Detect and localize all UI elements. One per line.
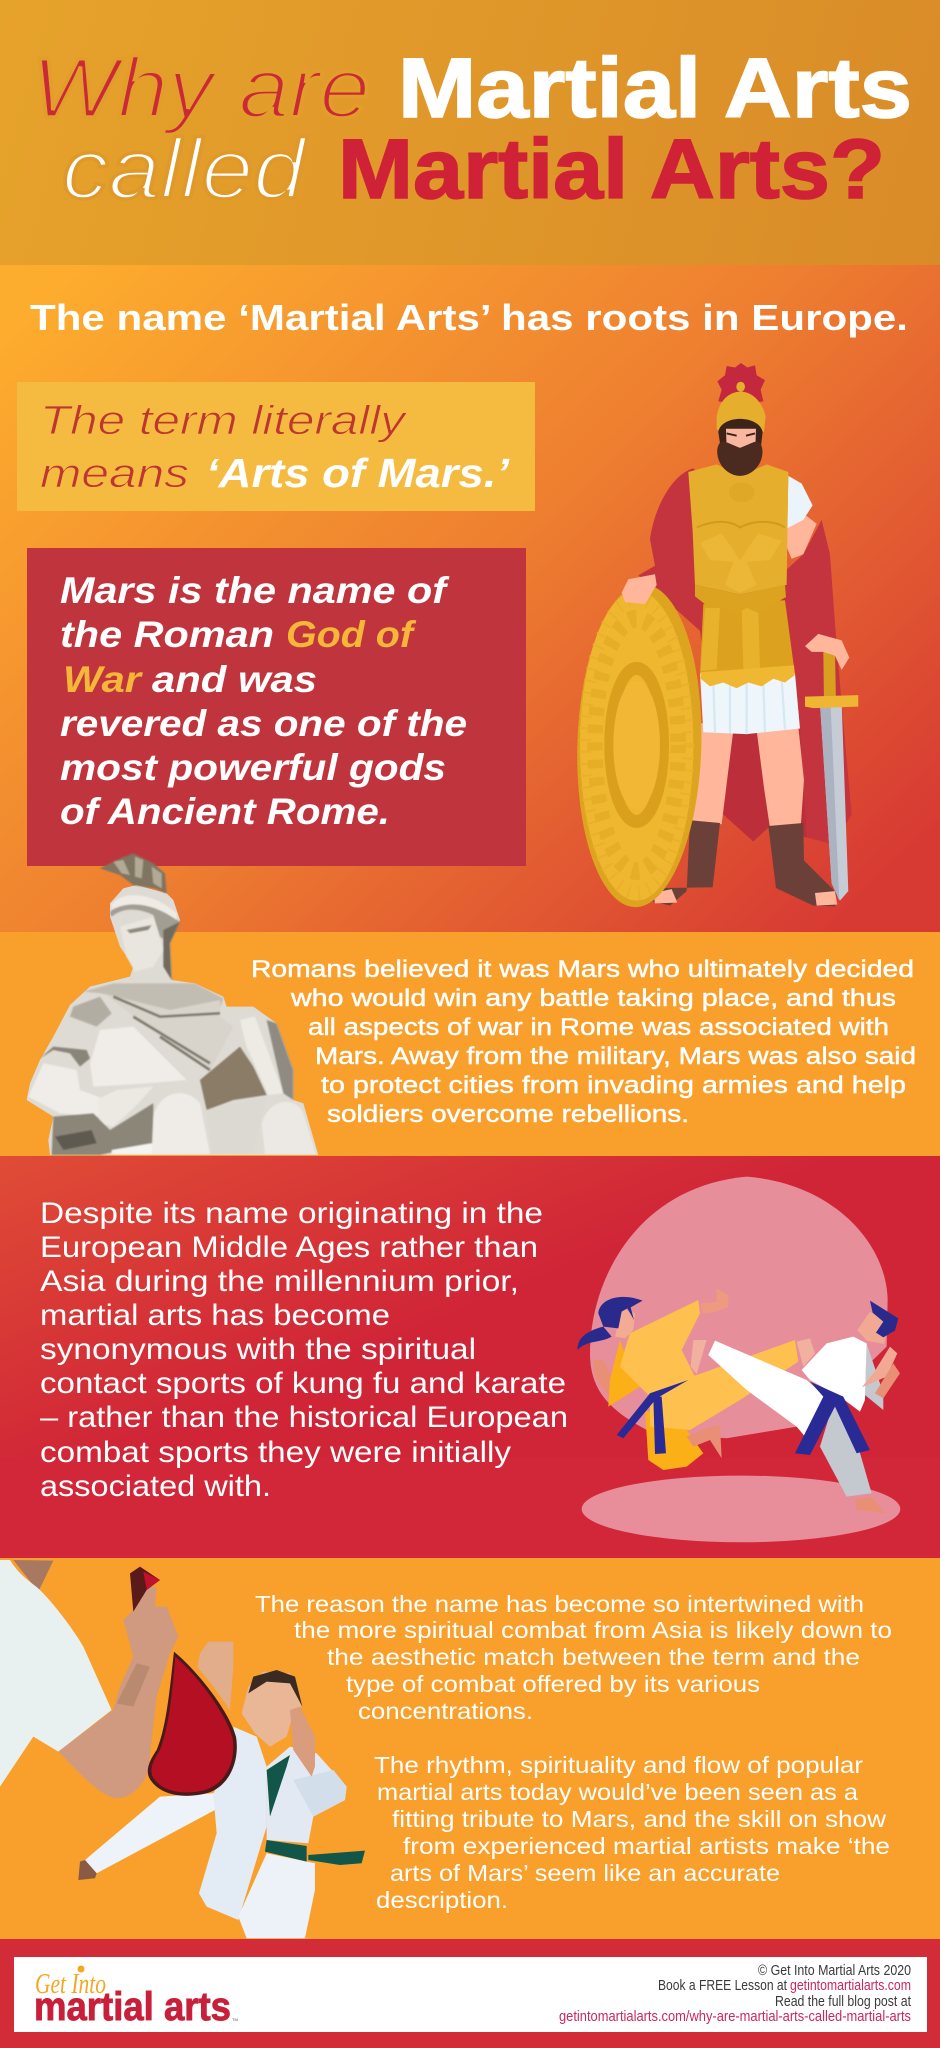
panel: Mars introduction [0, 265, 940, 932]
logo: Get Into Martial Arts: martial arts [34, 1985, 231, 2029]
drapery [83, 983, 223, 1017]
text block: credits and links [559, 1962, 912, 2025]
text block: Romans believed: soldiers overcome rebellions. [327, 1101, 689, 1128]
callout: Arts of Mars: The term literally [40, 397, 408, 443]
heading: roots in Europe: The name ‘Martial Arts’ has roots in Europe. [30, 297, 908, 338]
text block: tribute to Mars: description. [376, 1887, 508, 1913]
text block: tribute to Mars: martial arts today would’ve been seen as a [377, 1779, 858, 1805]
armor [700, 600, 794, 674]
text block: aesthetic match: the aesthetic match between the term and the [327, 1644, 860, 1670]
panel: footer [0, 1939, 940, 2048]
panel: title band [0, 0, 940, 265]
callout: Arts of Mars: ‘Arts of Mars.’ [206, 450, 510, 496]
callout: Mars is the Roman God of War: of Ancient Rome. [60, 791, 390, 832]
boy [78, 1642, 365, 1938]
text block: Romans believed: Romans believed it was Mars who ultimately decided [251, 956, 914, 983]
woman fighter [578, 1288, 815, 1470]
panel: The reason the name [0, 1558, 940, 1939]
face [120, 917, 163, 972]
text block: tribute to Mars: The rhythm, spirituality and flow of popular [374, 1752, 863, 1778]
text block: credits and links: © Get Into Martial Arts 2020 [758, 1962, 911, 1979]
text block: Romans believed: to protect cities from invading armies and help [321, 1072, 906, 1099]
text block: tribute to Mars: from experienced martial artists make ‘the [403, 1833, 890, 1859]
text block: credits and links: Read the full blog post at [775, 1993, 912, 2010]
callout: Mars is the Roman God of War: War [63, 659, 144, 700]
text block: aesthetic match [255, 1591, 892, 1724]
logo: Get Into Martial Arts [34, 1966, 238, 2029]
cavity behind drape [200, 1047, 267, 1110]
panel: Despite its name [0, 1156, 940, 1558]
callout: Mars is the Roman God of War: revered as one of the [60, 703, 467, 744]
callout: Mars is the Roman God of War: God of [286, 614, 417, 655]
text block: credits and links: Book a FREE Lesson at [658, 1977, 788, 1994]
plume [100, 853, 167, 893]
text block: Despite its name: Despite its name originating in the [40, 1197, 543, 1230]
sleeve [40, 1047, 90, 1067]
kilt [700, 673, 800, 734]
text block: credits and links: getintomartialarts.com [790, 1977, 911, 1994]
text block: aesthetic match: type of combat offered by its various [346, 1671, 760, 1697]
callout: Arts of Mars [17, 382, 535, 511]
text block: Despite its name: associated with. [40, 1470, 271, 1503]
title: Why are [32, 41, 370, 135]
callout: Arts of Mars: means [40, 450, 189, 496]
legs [692, 723, 733, 824]
floor shadow [582, 1476, 900, 1542]
text block: aesthetic match: The reason the name has become so intertwined with [255, 1591, 864, 1617]
text block: Despite its name: martial arts has become [40, 1299, 390, 1332]
statue surface shading [28, 853, 316, 1155]
head [717, 363, 765, 407]
panel: Romans believed [0, 932, 940, 1156]
text block: aesthetic match: concentrations. [358, 1698, 533, 1724]
text block: tribute to Mars [374, 1752, 890, 1913]
callout: Mars is the Roman God of War: Mars is the name of [60, 570, 450, 611]
callout: Mars is the Roman God of War: most powerful gods [60, 747, 446, 788]
shield [572, 582, 706, 910]
cape [638, 468, 852, 844]
callout: Mars is the Roman God of War [27, 548, 526, 866]
icon: boy kicking a coach's pad [0, 1560, 365, 1938]
text block: Romans believed: who would win any battle taking place, and thus [290, 985, 896, 1012]
hand on sword [805, 634, 849, 670]
arm and sleeve [785, 516, 817, 559]
belly and arm [90, 1027, 187, 1087]
callout: Mars is the Roman God of War: and was [152, 659, 317, 700]
backdrop blob [590, 1177, 888, 1438]
title: Martial Arts? [338, 122, 885, 216]
text block: Romans believed: Mars. Away from the military, Mars was also said [315, 1043, 916, 1070]
text block: Despite its name: combat sports they were initially [40, 1436, 511, 1469]
text block: Despite its name [40, 1197, 568, 1503]
text block: Despite its name: Asia during the millennium prior, [40, 1265, 519, 1298]
icon: Roman god Mars with shield and sword [572, 363, 858, 910]
red pad [148, 1652, 237, 1796]
hand on shield [622, 574, 657, 604]
logo: Get Into Martial Arts: TM [232, 2017, 238, 2022]
text block: Romans believed [251, 956, 916, 1128]
helmet and hair [110, 902, 179, 943]
logo: Get Into Martial Arts: Get Into [35, 1968, 106, 2000]
title: called [62, 122, 308, 216]
callout: Mars is the Roman God of War: the Roman [60, 614, 274, 655]
sword [823, 650, 836, 702]
man fighter [708, 1301, 900, 1513]
icon: marble statue of Mars [27, 853, 318, 1155]
text block: Despite its name: synonymous with the spiritual [40, 1333, 476, 1366]
title [32, 41, 912, 216]
boots [650, 820, 720, 906]
text block: aesthetic match: the more spiritual combat from Asia is likely down to [294, 1617, 892, 1643]
text block: Romans believed: all aspects of war in Rome was associated with [308, 1014, 889, 1041]
text block: tribute to Mars: fitting tribute to Mars, and the skill on show [392, 1806, 886, 1832]
text block: Despite its name: contact sports of kung fu and karate [40, 1367, 566, 1400]
icon: two karate fighters [578, 1177, 900, 1542]
sword hilt and knee [52, 1103, 153, 1155]
coach [0, 1560, 178, 1798]
text block: Despite its name: European Middle Ages rather than [40, 1231, 538, 1264]
text block: tribute to Mars: arts of Mars’ seem like an accurate [390, 1860, 780, 1886]
text block: Despite its name: – rather than the historical European [40, 1401, 568, 1434]
title: Martial Arts [398, 41, 912, 135]
